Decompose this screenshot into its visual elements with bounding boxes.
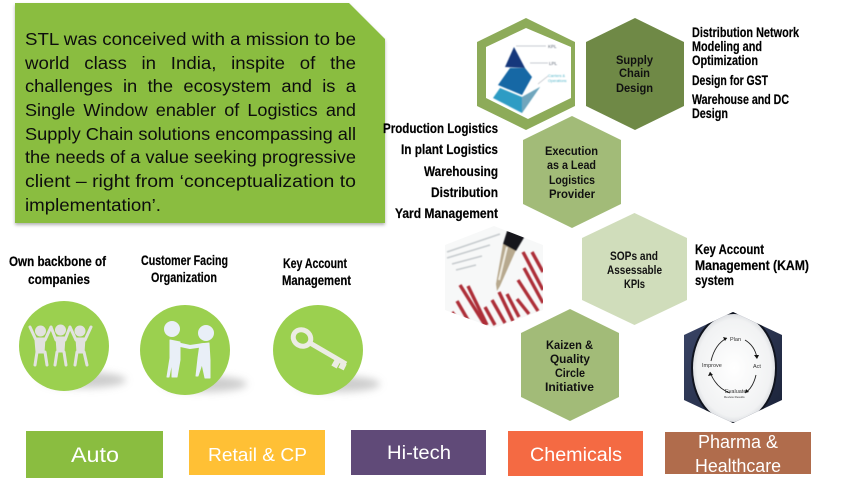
heading: own backbone of companies [9,253,106,287]
panel: mission statement: world class in India, inspite of the [24,53,356,73]
text: key account management system [695,241,809,288]
icon: pyramid hexagon: KPL [548,44,557,49]
sector: hi-tech [351,430,486,475]
panel: mission statement [15,3,385,223]
icon: bar chart with pen [445,226,543,328]
hexagon: SOPs and assessable KPIs: Assessable [607,265,662,277]
hexagon: execution as a lead logistics provider: Execution [545,146,598,158]
text: supply chain design services: Modeling and [692,38,762,54]
text: logistics services: Distribution [431,184,498,200]
text: logistics services: Yard Management [395,205,498,221]
text: supply chain design services: Optimization [692,52,758,68]
text: logistics services [383,120,498,221]
icon: pyramid hexagon: Carriers & [548,74,566,78]
sector: chemicals: Chemicals [530,445,622,466]
hexagon: supply chain design: Chain [619,68,650,80]
panel: mission statement: challenges in the ecosystem and is a [25,76,356,96]
hexagon: supply chain design: Design [616,83,653,95]
hexagon: supply chain design [586,18,684,130]
text: supply chain design services: Distribution Network [692,24,799,40]
text: logistics services: In plant Logistics [401,141,498,157]
hexagon: execution as a lead logistics provider [523,116,621,228]
panel: mission statement: STL was conceived with a mission to be [25,29,356,49]
hexagon: SOPs and assessable KPIs [582,213,687,325]
heading: key account management: Management [282,272,351,288]
icon: plan act evaluate improve cycle: Review Results [724,395,745,399]
hexagon: kaizen and quality circle initiative: Circle [555,368,585,380]
heading: customer facing organization [141,252,228,285]
icon: pyramid hexagon: LPL [549,61,558,66]
hexagon: supply chain design: Supply [616,55,654,67]
icon: plan act evaluate improve cycle: Improve [702,363,722,369]
icon: group of people circle [19,301,126,391]
sector: hi-tech: Hi-tech [387,443,451,464]
panel: mission statement: the needs of a value seeking progressive [25,147,356,167]
heading: key account management [282,255,351,288]
hexagon: kaizen and quality circle initiative: Kaizen & [546,340,593,352]
sector: pharma and healthcare [665,432,811,476]
heading: own backbone of companies: Own backbone of [9,253,106,269]
hexagon: execution as a lead logistics provider: as a Lead [547,160,596,172]
heading: customer facing organization: Customer Facing [141,252,228,268]
hexagon: execution as a lead logistics provider: Provider [549,189,596,201]
icon: pyramid hexagon [477,18,575,130]
text: supply chain design services [692,24,799,121]
hexagon: SOPs and assessable KPIs: SOPs and [610,251,658,263]
text: logistics services: Warehousing [424,163,498,179]
hexagon: execution as a lead logistics provider: Logistics [549,175,595,187]
icon: pyramid hexagon: Operations [548,79,567,83]
hexagon: kaizen and quality circle initiative: Initiative [545,382,594,394]
sector: pharma and healthcare: Healthcare [695,456,781,476]
sector: auto: Auto [71,444,119,467]
panel: mission statement: Supply Chain solutions encompassing all [25,124,356,144]
icon: plan act evaluate improve cycle: Evaluate [725,389,746,395]
icon: plan act evaluate improve cycle: Act [753,364,761,370]
sector: chemicals [508,431,643,476]
sector: retail and CP: Retail & CP [208,445,307,465]
sector: auto [26,431,163,478]
text: supply chain design services: Design [692,105,728,121]
icon: key circle [273,305,380,395]
sector: retail and CP [189,430,325,475]
icon: plan act evaluate improve cycle: Plan [730,337,741,343]
panel: mission statement: client – right from ‘conceptualization to [25,171,356,191]
heading: own backbone of companies: companies [28,271,90,287]
text: logistics services: Production Logistics [383,120,498,136]
text: key account management system: Management (KAM) [695,257,809,273]
panel: mission statement: Single Window enabler of Logistics and [25,100,356,120]
text: key account management system: system [695,272,734,288]
hexagon: kaizen and quality circle initiative [521,309,619,421]
text: supply chain design services: Warehouse and DC [692,91,789,107]
icon: handshake circle [140,305,247,395]
text: supply chain design services: Design for GST [692,72,768,88]
hexagon: kaizen and quality circle initiative: Quality [550,354,591,366]
sector: pharma and healthcare: Pharma & [698,432,778,452]
text: key account management system: Key Account [695,241,764,257]
icon: plan act evaluate improve cycle [684,312,782,423]
panel: mission statement: implementation’. [25,195,161,215]
heading: customer facing organization: Organization [151,269,217,285]
hexagon: SOPs and assessable KPIs: KPIs [624,279,645,291]
heading: key account management: Key Account [283,255,347,271]
